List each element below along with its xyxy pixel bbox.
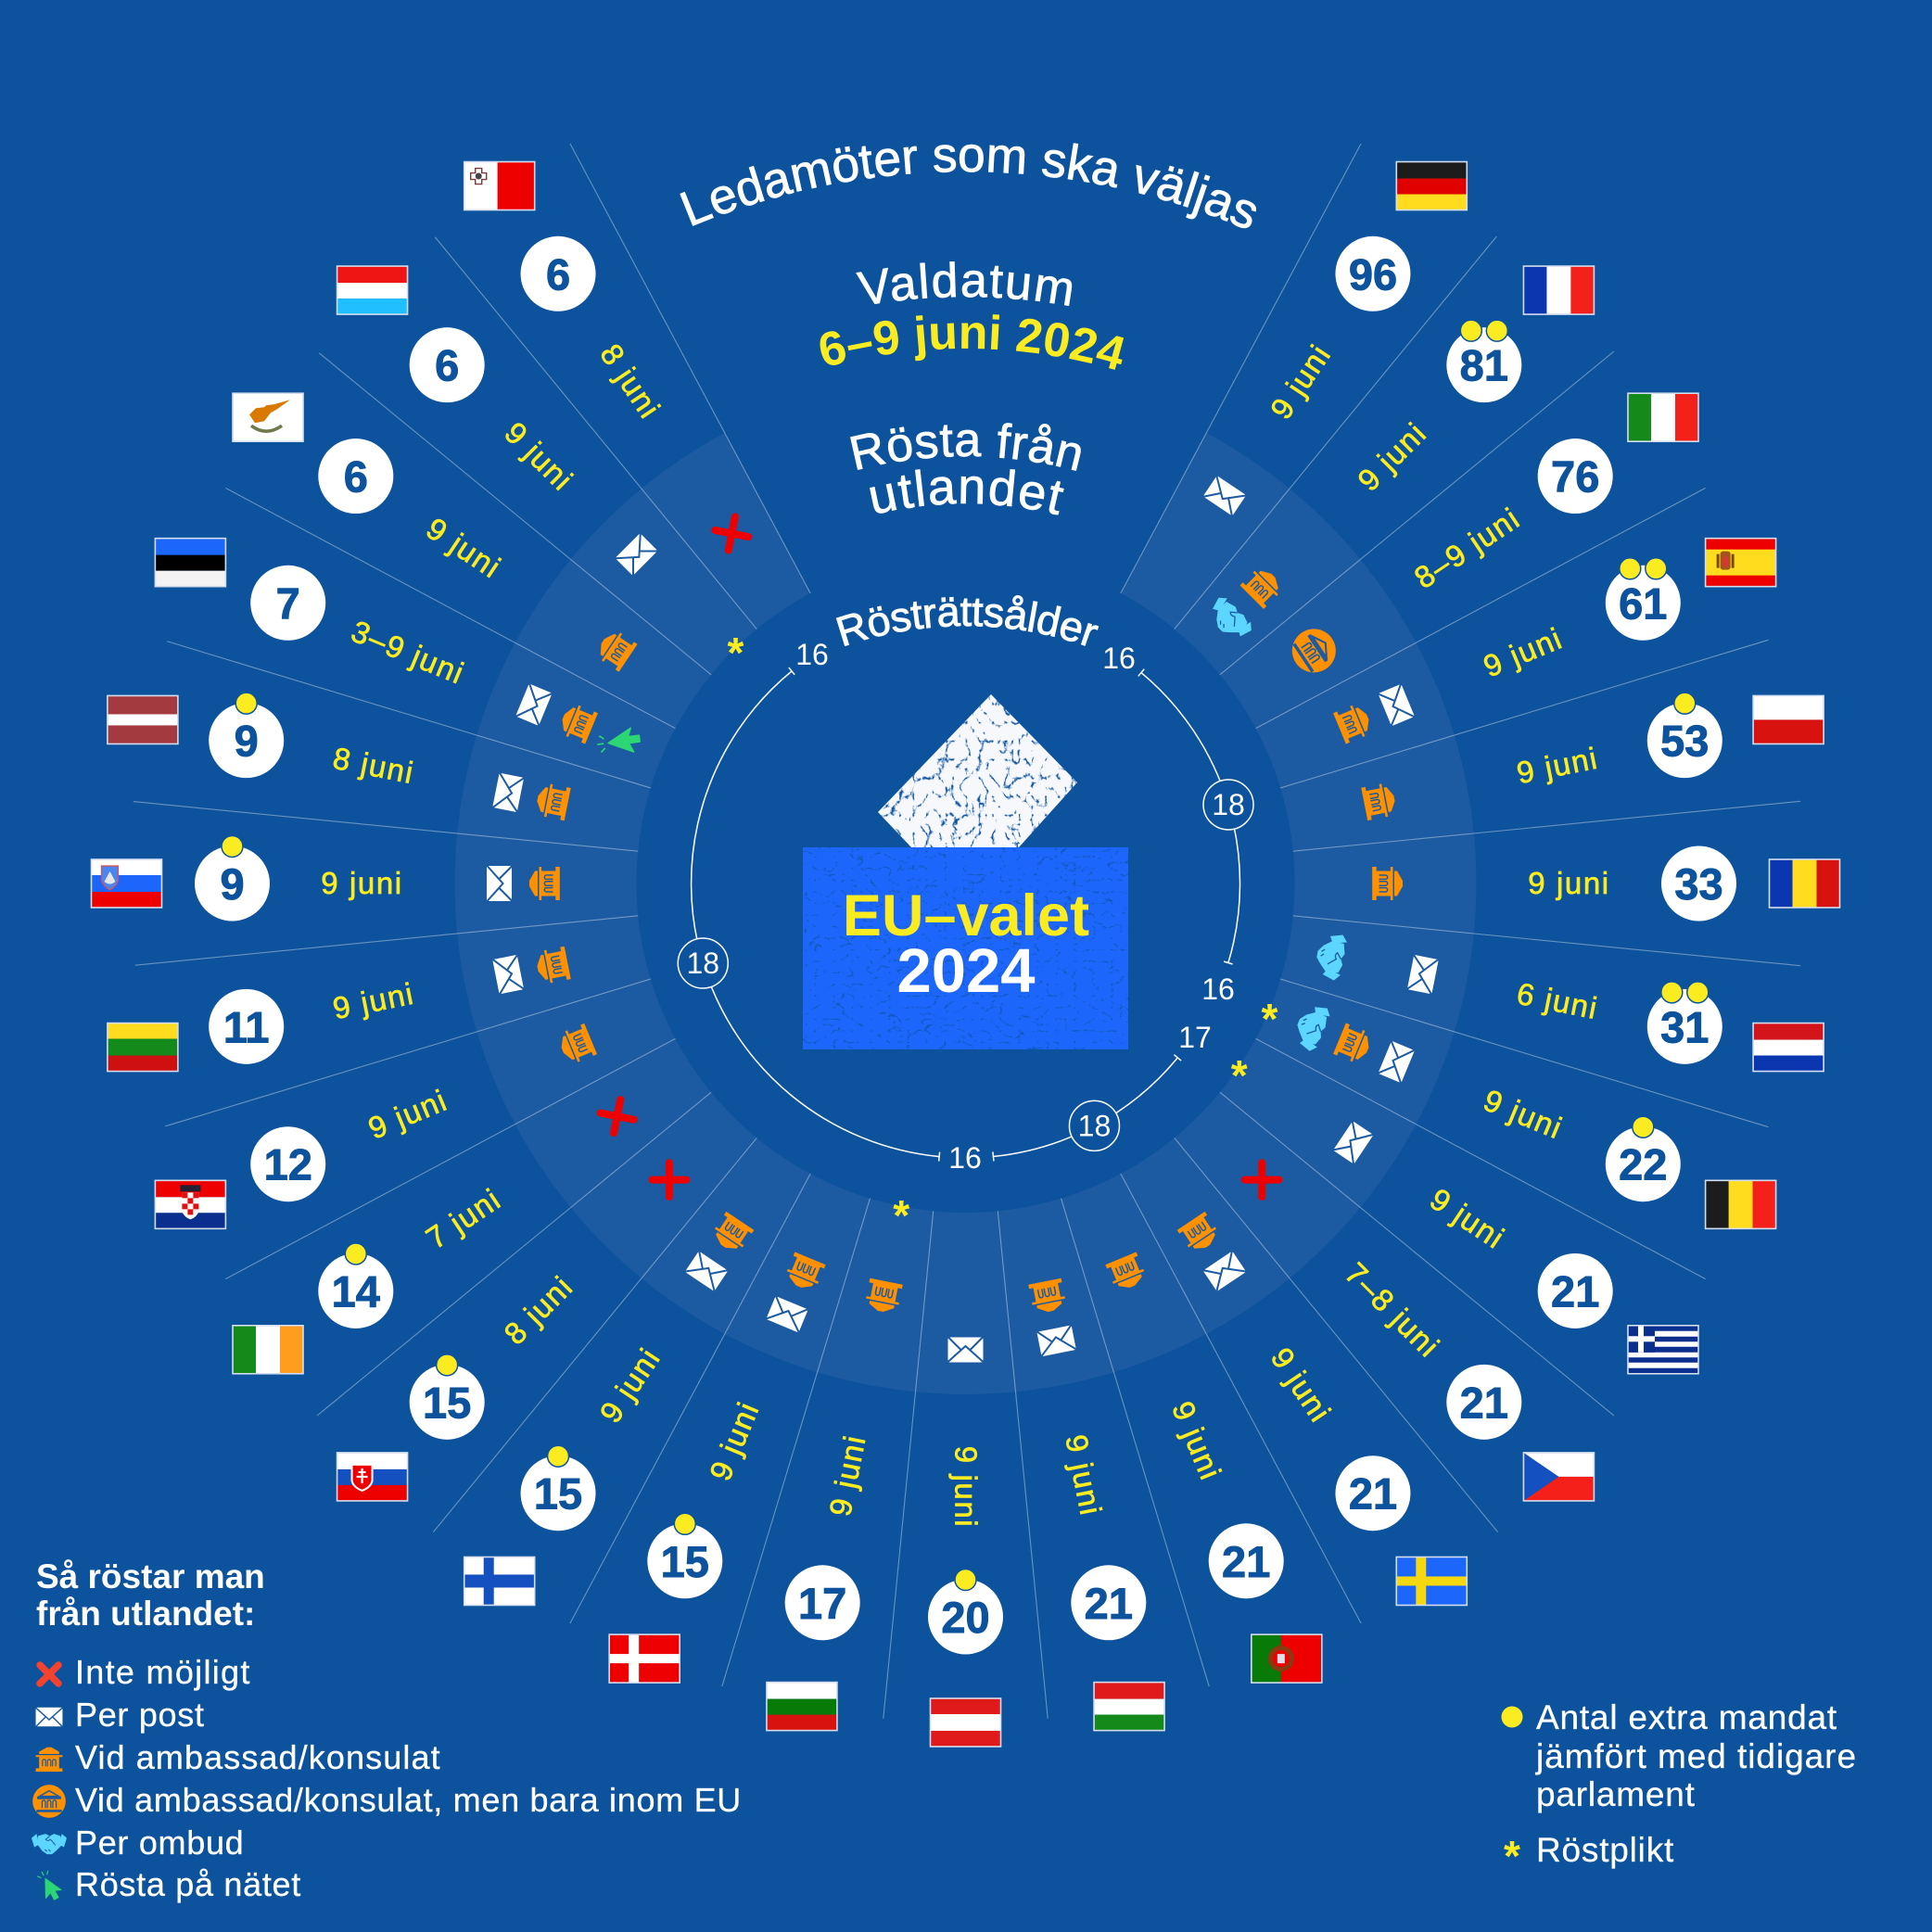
seats: 33	[1661, 845, 1736, 922]
icon: embassy	[535, 782, 571, 820]
seats: 21	[1538, 1253, 1613, 1328]
country: Croatia	[133, 994, 609, 1265]
legend: extra seats: Antal extra mandat	[1536, 1698, 1837, 1736]
date: 9 juni	[1514, 741, 1601, 790]
date: 9 juni	[498, 415, 580, 498]
seats: 9: 9	[235, 717, 259, 766]
seats: 6	[410, 327, 485, 402]
date: 9 juni	[822, 1431, 872, 1519]
seats: 15: 15	[423, 1378, 471, 1427]
seats: 6: 6	[435, 341, 459, 390]
legend heading line 2: från utlandet:	[36, 1595, 255, 1633]
heading: Rösta från utlandet	[850, 423, 1081, 515]
flag: Denmark	[609, 1634, 680, 1683]
country: Czechia	[1215, 1134, 1626, 1544]
flag: Czechia	[1523, 1453, 1594, 1501]
icon: post	[1202, 476, 1246, 516]
legend: extra seats: parlament	[1536, 1775, 1696, 1813]
seats: 15	[647, 1513, 722, 1598]
date: 9 juni	[1528, 866, 1610, 900]
compulsory voting mark: *	[728, 629, 744, 677]
heading: Valdatum: Valdatum	[856, 261, 1072, 306]
date: 9 juni	[1479, 1083, 1568, 1146]
flag: Romania	[1769, 859, 1839, 908]
legend: proxy: Per ombud	[75, 1824, 244, 1862]
seats: 20: 20	[941, 1593, 990, 1642]
icon: compulsory voting star: *	[1504, 1832, 1520, 1880]
legend: post: Per post	[75, 1696, 205, 1734]
age label 16: 16	[1102, 642, 1136, 675]
seats: 14: 14	[332, 1266, 380, 1316]
date: 9 juni	[1265, 1341, 1339, 1429]
flag: Hungary	[1094, 1683, 1164, 1731]
age label 17: 17	[1178, 1021, 1212, 1054]
seats: 6: 6	[344, 452, 368, 502]
icon: embassy	[864, 1278, 903, 1315]
date: 9 juni	[330, 976, 417, 1025]
date: 9 juni	[949, 1446, 983, 1528]
seats: 6	[318, 439, 393, 514]
date: 9 juni	[1351, 415, 1433, 498]
icon: embassy	[556, 1023, 597, 1066]
seats: 15: 15	[534, 1469, 582, 1519]
icon: embassy	[1361, 782, 1397, 820]
compulsory voting mark: *	[1262, 995, 1278, 1043]
age label 16: 16	[948, 1141, 982, 1175]
icon: post	[616, 533, 658, 576]
seats: 9	[195, 836, 270, 922]
legend: embassy EU only: Vid ambassad/konsulat, men bara inom EU	[75, 1781, 742, 1819]
icon: embassy	[1177, 1212, 1222, 1255]
flag: Portugal	[1252, 1634, 1322, 1683]
flag: Slovenia	[91, 859, 161, 908]
date: 8 juni	[593, 337, 667, 426]
country: Spain	[1318, 495, 1798, 774]
icon: not possible	[653, 1163, 686, 1197]
date: 9 juni	[1424, 1181, 1511, 1255]
date: 9 juni	[321, 866, 403, 900]
seats: 7: 7	[276, 578, 300, 628]
icon: embassy	[1333, 1023, 1374, 1065]
country: Germany	[1174, 124, 1497, 536]
country: Greece	[1198, 1014, 1727, 1417]
date: 3–9 juni	[347, 614, 470, 691]
seats: 15	[521, 1445, 596, 1531]
flag: Slovakia	[337, 1453, 408, 1501]
icon: post	[1406, 955, 1439, 994]
icon: post	[487, 866, 512, 901]
country: Slovenia	[91, 836, 560, 922]
icon: post	[1378, 684, 1415, 726]
seats: 61: 61	[1619, 578, 1667, 628]
seats: 6: 6	[546, 249, 570, 299]
country: Portugal	[1075, 1239, 1345, 1710]
icon: post	[685, 1251, 729, 1291]
age label 16: 16	[795, 638, 829, 671]
ballot paper	[878, 694, 1077, 847]
voting age arcs: 18	[1078, 1109, 1111, 1142]
date: 8 juni	[330, 741, 417, 790]
icon: proxy	[32, 1834, 67, 1854]
seats: 6	[521, 236, 596, 311]
country: France	[1178, 220, 1626, 667]
icon: online	[596, 727, 642, 756]
icon: embassy	[593, 628, 638, 672]
seats: 31: 31	[1660, 1002, 1709, 1051]
country: Malta	[434, 124, 782, 573]
flag: Latvia	[108, 695, 178, 744]
age label 16: 16	[1201, 972, 1235, 1006]
icon: embassy	[535, 947, 571, 985]
seats: 14	[318, 1243, 393, 1328]
icon: proxy	[1313, 931, 1348, 982]
country: Lithuania	[95, 920, 577, 1099]
icon: online	[34, 1867, 64, 1902]
voting age arcs: 18	[1212, 788, 1245, 821]
country: Ireland	[198, 1060, 656, 1417]
seats: 15	[410, 1354, 485, 1440]
heading: Ledamöter som ska väljas: Ledamöter som ska väljas	[680, 143, 1256, 228]
seats: 53	[1647, 693, 1722, 778]
flag: Germany	[1396, 162, 1467, 210]
seats: 61	[1606, 558, 1681, 641]
flag: Finland	[464, 1557, 535, 1605]
ballot box	[803, 847, 1128, 1049]
seats: 21: 21	[1085, 1579, 1133, 1628]
seats: 21: 21	[1349, 1469, 1397, 1519]
seats: 20	[928, 1569, 1003, 1654]
heading: election dates: 6–9 juni 2024	[820, 314, 1124, 370]
flag: Netherlands	[1753, 1023, 1824, 1072]
date: 9 juni	[1165, 1396, 1228, 1485]
heading: Rösträttsålder: Rösträttsålder	[836, 595, 1099, 647]
country: Sweden	[1148, 1192, 1497, 1643]
date: 8 juni	[497, 1269, 579, 1351]
icon: post	[1333, 1121, 1374, 1164]
country: Poland	[1354, 659, 1836, 847]
date: 9 juni	[1264, 337, 1338, 426]
date: 7 juni	[420, 1181, 507, 1255]
seats: 53: 53	[1660, 717, 1709, 766]
icon: post	[492, 955, 525, 994]
seats: 21	[1446, 1365, 1521, 1440]
date: 9 juni	[420, 511, 508, 585]
seats: 11: 11	[223, 1002, 270, 1051]
icon: not possible	[715, 516, 748, 551]
date: 9 juni	[363, 1083, 452, 1146]
seats: 17: 17	[798, 1579, 846, 1628]
seats: 76: 76	[1551, 452, 1599, 502]
icon: extra seat dot	[1502, 1706, 1522, 1728]
country: Belgium	[1239, 950, 1801, 1265]
flag: Greece	[1628, 1326, 1698, 1374]
icon: post	[36, 1708, 62, 1727]
country: Cyprus	[204, 350, 657, 702]
legend: extra seats: jämfört med tidigare	[1535, 1737, 1857, 1775]
country: Denmark	[582, 1239, 856, 1710]
flag: Croatia	[155, 1180, 225, 1228]
icon: post	[492, 773, 525, 812]
box title: 2024: 2024	[896, 936, 1036, 1006]
box title: EU-valet: EU–valet	[843, 883, 1089, 948]
country: Luxembourg	[305, 223, 789, 707]
voting methods band	[454, 433, 1477, 1394]
legend: not possible: Inte möjligt	[75, 1653, 251, 1691]
icon: post	[766, 1296, 808, 1332]
seats: 21	[1335, 1455, 1410, 1531]
compulsory voting mark: *	[1231, 1051, 1248, 1099]
seats: 33: 33	[1674, 859, 1723, 909]
legend: online: Rösta på nätet	[75, 1865, 301, 1903]
seats: 31	[1647, 982, 1722, 1064]
date: 6 juni	[1514, 976, 1601, 1025]
icon: embassy EU only	[32, 1785, 66, 1818]
seats: 21: 21	[1460, 1378, 1508, 1427]
seats: 96: 96	[1349, 249, 1397, 299]
flag: Spain	[1706, 539, 1776, 587]
icon: proxy	[1290, 1000, 1332, 1053]
country: Finland	[429, 1188, 783, 1643]
country: Slovakia	[300, 1128, 716, 1544]
icon: embassy	[1105, 1252, 1148, 1293]
legend: extra seats	[1535, 1698, 1857, 1813]
seats: 21: 21	[1551, 1266, 1599, 1316]
flag: France	[1523, 266, 1594, 314]
icon: proxy	[1203, 593, 1255, 645]
seats: 96	[1335, 236, 1410, 311]
seats: 12	[250, 1126, 325, 1201]
voting age arcs: 18	[686, 947, 719, 980]
country: Italy	[1267, 350, 1727, 706]
icon: embassy	[557, 702, 598, 744]
flag: Italy	[1628, 393, 1698, 441]
flag: Ireland	[233, 1326, 303, 1374]
legend: how to vote from abroad	[32, 1557, 742, 1903]
icon: post	[1378, 1041, 1415, 1083]
heading: Rösta från utlandet: utlandet	[870, 469, 1064, 515]
flag: Sweden	[1396, 1557, 1467, 1605]
icon: embassy	[529, 867, 560, 900]
seats: 22	[1606, 1116, 1681, 1201]
country: Hungary	[1001, 1273, 1178, 1745]
seats: 9: 9	[220, 859, 245, 909]
legend: compulsory voting: Röstplikt	[1536, 1831, 1674, 1869]
seats: 9	[209, 693, 284, 778]
icon: embassy	[783, 1252, 826, 1293]
country: Netherlands	[1309, 903, 1837, 1099]
country: Bulgaria	[753, 1182, 947, 1745]
icon: post	[1202, 1251, 1246, 1291]
icon: not possible	[1245, 1163, 1278, 1197]
date: 9 juni	[703, 1396, 766, 1485]
seats: 21: 21	[1222, 1537, 1270, 1586]
country: Austria	[928, 1337, 1003, 1747]
icon: post	[515, 683, 553, 726]
date: 8–9 juni	[1408, 501, 1526, 595]
date: 9 juni	[1059, 1431, 1109, 1519]
seats: 21	[1071, 1565, 1146, 1640]
icon: post	[947, 1337, 983, 1363]
icon: embassy	[1028, 1278, 1067, 1315]
icon: embassy	[1333, 702, 1374, 744]
icon: embassy EU only	[1284, 620, 1344, 680]
icon: embassy	[1240, 564, 1285, 609]
seats: 81: 81	[1460, 341, 1508, 390]
seats: 22: 22	[1619, 1140, 1667, 1189]
icon: embassy	[1372, 867, 1403, 900]
date: 9 juni	[592, 1341, 667, 1429]
icon: embassy	[709, 1212, 754, 1255]
icon: post	[1036, 1325, 1076, 1356]
icon: not possible	[40, 1665, 58, 1684]
seats: 81	[1446, 320, 1521, 402]
flag: Austria	[931, 1698, 1001, 1747]
flag: Luxembourg	[337, 266, 408, 314]
seats: 17	[785, 1565, 860, 1640]
flag: Lithuania	[108, 1023, 178, 1072]
date: 7–8 juni	[1339, 1255, 1447, 1364]
seats: 76	[1538, 439, 1613, 514]
icon: embassy	[36, 1748, 62, 1772]
seats: 15: 15	[661, 1537, 709, 1586]
flag: Belgium	[1706, 1180, 1776, 1228]
seats: 7	[250, 566, 325, 641]
flag: Cyprus	[233, 393, 303, 441]
flag: Bulgaria	[767, 1683, 837, 1731]
flag: Poland	[1753, 695, 1824, 744]
legend: extra seats and compulsory voting	[1502, 1698, 1857, 1880]
country: Romania	[1372, 845, 1839, 922]
flag: Estonia	[155, 539, 225, 587]
seats: 12: 12	[264, 1140, 312, 1189]
country: Latvia	[95, 659, 578, 847]
date: 9 juni	[1479, 620, 1568, 683]
heading: Rösta från utlandet: Rösta från	[850, 423, 1081, 471]
seats: 11	[209, 989, 284, 1064]
legend heading: Så röstar man	[36, 1557, 265, 1595]
voting age arcs	[678, 667, 1253, 1162]
country: Estonia	[133, 502, 660, 794]
flag: Malta	[464, 162, 535, 210]
seats: 21	[1209, 1523, 1284, 1598]
legend: embassy: Vid ambassad/konsulat	[75, 1738, 441, 1776]
compulsory voting mark: *	[893, 1191, 909, 1239]
icon: not possible	[601, 1099, 634, 1133]
